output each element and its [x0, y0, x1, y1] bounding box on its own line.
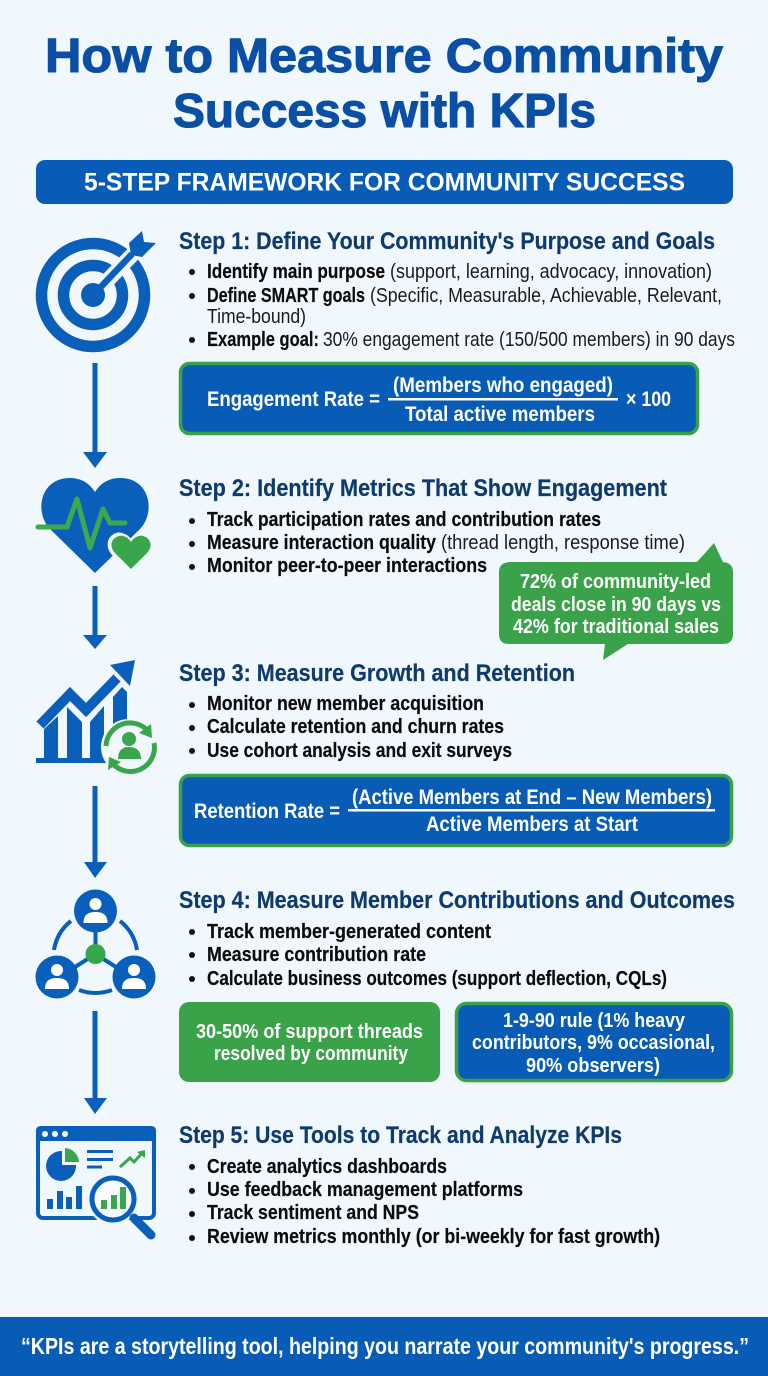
icon: member network — [36, 890, 156, 998]
formula: retention rate: Retention Rate = — [194, 800, 340, 823]
title — [45, 30, 723, 138]
step 2 bullets: (thread length, response time) — [441, 531, 685, 554]
callout: community-led deals — [499, 543, 733, 660]
title: Success with KPIs — [173, 85, 596, 138]
banner: framework heading: 5-STEP FRAMEWORK FOR COMMUNITY SUCCESS — [84, 168, 685, 196]
formula: engagement rate — [180, 364, 698, 434]
step 4 bullets: Track member-generated content — [207, 920, 491, 943]
step 3 bullets: Monitor new member acquisition — [207, 692, 484, 715]
step 1 bullets: Identify main purpose — [207, 260, 385, 283]
step 1 bullets: Define SMART goals — [207, 284, 365, 307]
step 5 bullets — [189, 1155, 660, 1248]
step 4 bullets — [189, 920, 667, 990]
step 1 bullets: Example goal: — [207, 328, 319, 351]
step 5 bullets: Use feedback management platforms — [207, 1178, 523, 1201]
callout: community-led deals: 42% for traditional sales — [513, 615, 719, 638]
formula: retention rate — [180, 776, 732, 846]
title: How to Measure Community — [45, 30, 723, 83]
footer quote — [0, 1317, 768, 1376]
formula: engagement rate: × 100 — [626, 388, 671, 411]
step 2 bullets: Track participation rates and contribution rates — [207, 508, 601, 531]
formula: engagement rate: Engagement Rate = — [207, 388, 380, 411]
arrow: step 2 to step 3 — [83, 586, 107, 649]
icon: growth chart with retention badge — [36, 660, 157, 775]
step 5 bullets: Review metrics monthly (or bi-weekly for fast growth) — [207, 1225, 660, 1248]
step 1 bullets: (support, learning, advocacy, innovation) — [390, 260, 712, 283]
arrow: step 3 to step 4 — [84, 786, 107, 878]
arrow: step 4 to step 5 — [84, 1011, 107, 1114]
step 1 heading: Step 1: Define Your Community's Purpose and Goals — [179, 228, 715, 255]
step 1 bullets — [189, 260, 735, 351]
step 5 bullets: Create analytics dashboards — [207, 1155, 447, 1178]
arrow: step 1 to step 2 — [83, 363, 107, 468]
step 4 bullets: Calculate business outcomes (support deflection, CQLs) — [207, 967, 667, 990]
callout: support threads: 30-50% of support threads — [196, 1020, 423, 1043]
step 2 bullets — [189, 508, 685, 577]
callout: 1-9-90 rule: contributors, 9% occasional, — [472, 1031, 715, 1054]
callout: 1-9-90 rule: 1-9-90 rule (1% heavy — [503, 1009, 686, 1032]
panel: step 5 — [179, 1122, 660, 1248]
step 3 bullets: Use cohort analysis and exit surveys — [207, 739, 512, 762]
callout: community-led deals: 72% of community-led — [520, 570, 711, 593]
step 3 bullets — [189, 692, 512, 762]
step 1 bullets: (Specific, Measurable, Achievable, Relevant, — [370, 284, 722, 307]
formula: engagement rate: Total active members — [405, 403, 595, 426]
icon: analytics dashboard — [36, 1126, 156, 1235]
panel: step 3 — [179, 660, 732, 846]
panel: step 1 — [179, 228, 735, 434]
callout: 1-9-90 rule — [456, 1004, 732, 1080]
step 5 bullets: Track sentiment and NPS — [207, 1201, 419, 1224]
callout: support threads: resolved by community — [214, 1042, 409, 1065]
step 2 heading: Step 2: Identify Metrics That Show Engagement — [179, 475, 667, 502]
step 3 bullets: Calculate retention and churn rates — [207, 715, 504, 738]
step 4 bullets: Measure contribution rate — [207, 943, 426, 966]
callout: support threads — [179, 1002, 440, 1082]
icon: target with arrow — [42, 231, 156, 346]
step 1 bullets: Time-bound) — [207, 305, 306, 328]
step 3 heading: Step 3: Measure Growth and Retention — [179, 660, 575, 687]
step 2 bullets: Measure interaction quality — [207, 531, 437, 554]
formula: retention rate: (Active Members at End – New Members) — [352, 786, 712, 809]
callout: community-led deals: deals close in 90 days vs — [511, 593, 721, 616]
callout: 1-9-90 rule: 90% observers) — [526, 1054, 660, 1077]
panel: step 4 — [179, 887, 735, 1082]
icon: heart with pulse — [38, 478, 154, 574]
step 5 heading: Step 5: Use Tools to Track and Analyze KPIs — [179, 1122, 622, 1149]
banner: framework heading — [36, 160, 733, 204]
formula: retention rate: Active Members at Start — [426, 813, 638, 836]
panel: step 2 — [179, 475, 733, 660]
formula: engagement rate: (Members who engaged) — [393, 374, 613, 397]
step 2 bullets: Monitor peer-to-peer interactions — [207, 554, 487, 577]
